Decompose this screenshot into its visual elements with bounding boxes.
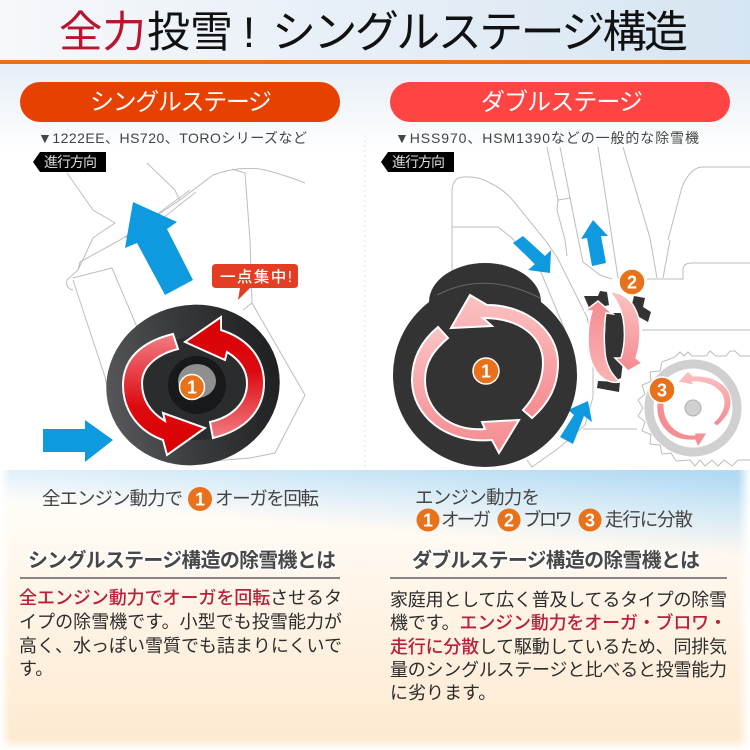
caption: double stage: 走行に分散: [605, 509, 693, 530]
panel: single stage header: [20, 82, 340, 122]
panel: double stage diagram: [381, 147, 750, 467]
rotation arrow: right: [185, 317, 264, 438]
text block: single stage description: [19, 588, 342, 679]
title: 全力: [59, 9, 146, 57]
text block: double stage description: 量のシングルステージと比べると投雪能力: [390, 660, 727, 680]
blower: [584, 291, 651, 392]
rotation arrow: auger lower: [412, 327, 519, 453]
title: [59, 8, 688, 57]
caption: double stage: ブロワ: [523, 509, 573, 530]
text block: double stage description: 家庭用として広く普及してるタイプの除雪: [390, 590, 727, 610]
rotation arrow: drive lower: [657, 403, 707, 447]
panel: double stage header: ダブルステージ: [481, 89, 643, 116]
machine outline: double stage: [452, 147, 750, 467]
badge 1: [180, 374, 204, 400]
text block: double stage description: [390, 590, 727, 703]
auger disc: [91, 289, 295, 481]
rotation arrow: blower right: [610, 292, 642, 371]
callout: focus: [212, 264, 298, 300]
arrow: snow thrown upward: [125, 202, 193, 295]
badge 2: 2: [627, 272, 637, 292]
badge 1: [473, 358, 499, 384]
badge 3: [649, 377, 675, 403]
caption: double stage: エンジン動力を: [415, 487, 540, 508]
badge 1: 1: [481, 362, 491, 382]
title: !: [243, 9, 255, 57]
title rule: [0, 60, 750, 64]
direction tag: 進行方向: [44, 154, 97, 170]
text block: single stage description: 全エンジン動力でオーガを回転させるタ: [19, 588, 342, 608]
heading rule: double stage: [390, 577, 727, 579]
caption: double stage: [415, 487, 693, 532]
rotation arrow: blower left: [585, 301, 620, 382]
title: シングルステージ構造: [272, 8, 688, 57]
text block: double stage description: に劣ります。: [390, 683, 496, 703]
heading rule: single stage: [20, 577, 340, 579]
panel: double stage header: [390, 82, 730, 122]
arrow: snow intake lower: [560, 401, 592, 444]
text block: single stage description: す。: [19, 659, 53, 679]
text block: single stage description: 高く、水っぽい雪質でも詰まりにくいで: [19, 636, 342, 656]
heading: what is single stage: シングルステージ構造の除雪機とは: [28, 548, 336, 572]
text block: double stage description: 機です。エンジン動力をオーガ・ブロワ・: [390, 612, 727, 633]
rotation arrow: auger upper: [451, 295, 558, 418]
direction tag: 進行方向: [392, 154, 445, 170]
rotation arrow: left: [123, 334, 205, 455]
drive gear: [638, 351, 750, 466]
badge 2: [619, 269, 645, 295]
callout: focus: 一点集中!: [220, 268, 292, 286]
text block: double stage description: 走行に分散して駆動しているため、同排気: [390, 637, 727, 657]
caption: double stage: オーガ: [441, 509, 491, 530]
single stage model note: ▼1222EE、HS720、TOROシリーズなど: [38, 130, 307, 146]
panel: single stage header: シングルステージ: [90, 89, 272, 116]
caption: double stage: 1: [423, 510, 433, 530]
caption: double stage: 2: [504, 510, 514, 530]
caption: single stage: 全エンジン動力で: [42, 488, 183, 509]
title: 投雪: [147, 9, 233, 57]
panel: single stage diagram: [33, 152, 305, 481]
caption: single stage: 1: [195, 490, 205, 510]
arrow: snow intake: [43, 420, 113, 462]
arrow: snow thrown upward: [581, 220, 608, 266]
caption: double stage: 3: [585, 510, 595, 530]
arrow: snow intake upper: [513, 236, 551, 273]
double stage model note: ▼HSS970、HSM1390などの一般的な除雪機: [395, 130, 699, 146]
rotation arrow: drive upper: [678, 371, 731, 426]
heading: what is double stage: ダブルステージ構造の除雪機とは: [412, 548, 700, 572]
direction tag: [33, 152, 106, 172]
badge 3: 3: [657, 380, 667, 400]
auger disc: [393, 263, 577, 467]
badge 1: 1: [187, 378, 197, 398]
caption: single stage: [42, 487, 319, 511]
caption: single stage: オーガを回転: [215, 488, 319, 509]
machine outline: single stage: [67, 163, 305, 462]
direction tag: [381, 152, 454, 172]
text block: single stage description: イプの除雪機です。小型でも投雪能力が: [19, 612, 342, 632]
